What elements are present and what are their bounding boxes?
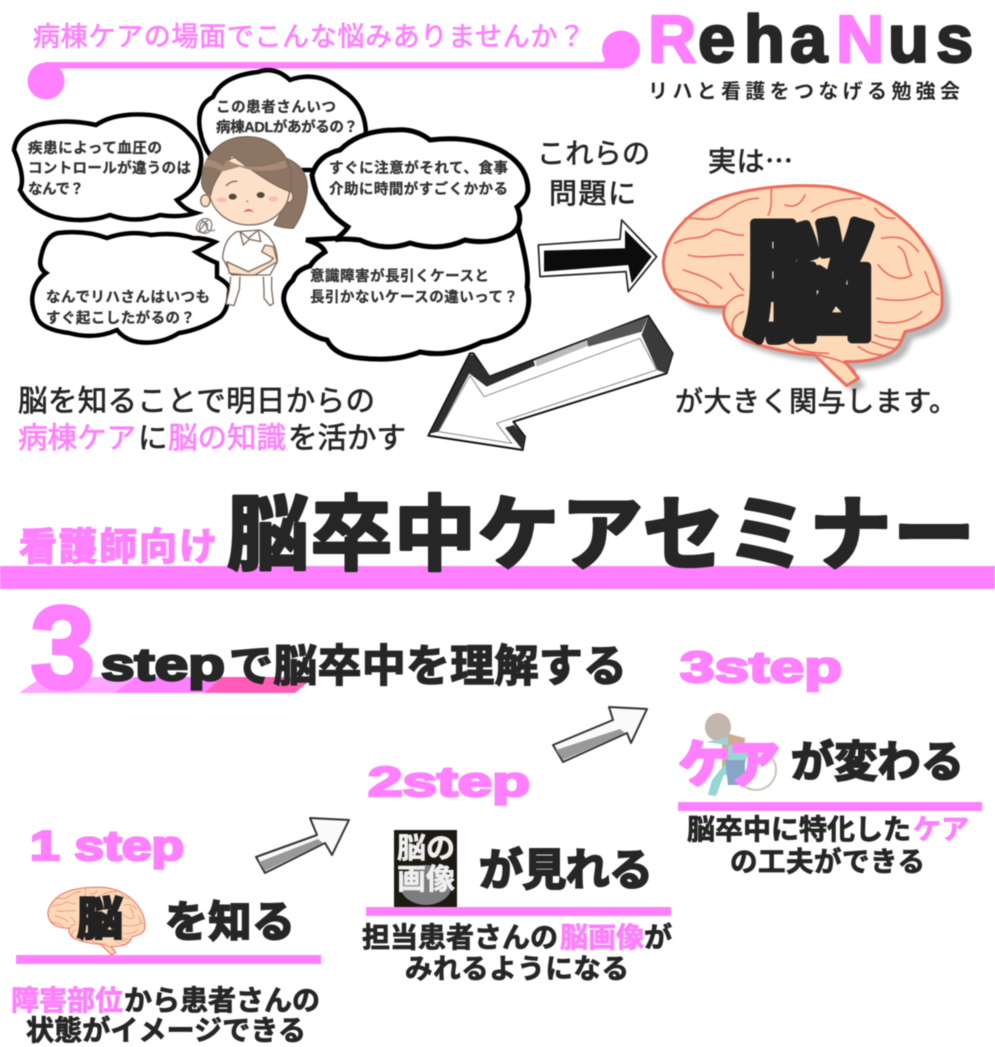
icon: caregiver with wheelchair bbox=[705, 713, 776, 796]
large numeral 3: 3 bbox=[30, 582, 96, 714]
logo wordmark: u bbox=[888, 2, 929, 77]
bubble: when does ward ADL improve: この患者さんいつ bbox=[216, 98, 336, 116]
know word: を知る bbox=[165, 899, 295, 947]
logo wordmark: a bbox=[790, 2, 828, 77]
bubble: why rehab staff sit patients up: なんでリハさんはいつも bbox=[46, 289, 210, 306]
question text: 病棟ケアの場面でこんな悩みありませんか？ bbox=[33, 22, 585, 52]
step 3 label: 3step bbox=[680, 643, 842, 692]
text line 2: に bbox=[138, 422, 168, 455]
text line 2: を活かす bbox=[288, 422, 406, 455]
text: use brain knowledge from tomorrow bbox=[18, 385, 406, 455]
step 1 description line 1: 障害部位 bbox=[11, 985, 123, 1016]
step 2 label: 2step bbox=[368, 758, 530, 805]
bubble: consciousness disorder cases: 意識障害が長引くケースと bbox=[310, 267, 489, 285]
step 3 divider bbox=[678, 802, 982, 811]
step word: step bbox=[101, 639, 225, 690]
icon: brain image bbox=[394, 830, 457, 907]
nurse face bbox=[209, 155, 289, 225]
bubble: consciousness disorder cases: 長引かないケースの違いって？ bbox=[310, 288, 518, 306]
logo wordmark: h bbox=[744, 2, 785, 77]
icon: small brain: 脳 bbox=[77, 893, 123, 945]
logo tagline: リハと看護をつなげる勉強会 bbox=[648, 80, 960, 103]
underline with round ends bbox=[28, 30, 640, 100]
nurse collar bbox=[240, 230, 261, 245]
worry scribble bbox=[196, 219, 215, 233]
arrow: from step 1 to step 2 bbox=[256, 818, 349, 873]
bubble: consciousness disorder cases bbox=[284, 225, 529, 359]
step 2 description line 1: 脳画像 bbox=[560, 922, 644, 953]
step 2 description line 1: が bbox=[644, 921, 672, 953]
text: actually: 実は… bbox=[708, 140, 793, 180]
logo wordmark: N bbox=[836, 2, 884, 77]
bubble: when does ward ADL improve bbox=[199, 70, 366, 170]
nurse ears bbox=[201, 195, 210, 207]
step 1 divider bbox=[16, 955, 321, 964]
illustration: worried nurse bbox=[196, 137, 307, 306]
logo wordmark: s bbox=[936, 2, 973, 77]
nurse crossed arms bbox=[227, 245, 277, 275]
bubble: distracted during meal assistance bbox=[312, 130, 528, 247]
bubble: why rehab staff sit patients up bbox=[32, 232, 229, 343]
text line 2: 病棟ケア bbox=[18, 422, 136, 455]
nurse legs and socks bbox=[226, 277, 273, 306]
ribbon underlay bbox=[19, 677, 314, 693]
panel: step 3 bbox=[678, 643, 982, 877]
brain illustration with kanji bbox=[663, 186, 949, 393]
bubble: blood pressure control: コントロールが違うのは bbox=[28, 159, 192, 177]
bubble: distracted during meal assistance: 介助に時間がすごくかかる bbox=[329, 180, 508, 198]
text: these problems bbox=[537, 138, 650, 209]
arrow: from step 2 to step 3 bbox=[553, 707, 647, 762]
panel: step 1 bbox=[11, 822, 321, 1046]
nurse hair highlight bbox=[204, 159, 287, 172]
text: plays a big role: が大きく関与します。 bbox=[675, 386, 957, 417]
step 3 description line 2: の工夫ができる bbox=[730, 846, 925, 877]
step 1 label: 1 step bbox=[30, 822, 184, 869]
heading: top question bbox=[28, 22, 640, 100]
title prefix: 看護師向け bbox=[19, 527, 217, 569]
care word: ケア bbox=[679, 737, 779, 793]
bubble: blood pressure control: なんで？ bbox=[28, 181, 84, 198]
band: seminar title underline bbox=[0, 566, 995, 589]
logo wordmark: e bbox=[698, 2, 735, 77]
nurse hair bbox=[202, 137, 292, 195]
step 1 description line 2: 状態がイメージできる bbox=[26, 1014, 306, 1046]
panel: worry speech bubbles bbox=[14, 70, 529, 359]
brain shadow bbox=[671, 193, 949, 393]
panel: step 2 bbox=[362, 758, 672, 984]
step 3 description line 1: 脳卒中に特化した bbox=[687, 814, 911, 845]
text line 2: 脳の知識 bbox=[168, 422, 286, 455]
nurse ponytail bbox=[274, 158, 307, 228]
icon: brain image: 脳の bbox=[397, 833, 455, 865]
can see word: が見れる bbox=[479, 846, 653, 895]
step 3 description line 1: ケア bbox=[913, 814, 969, 845]
text line 1: 脳を知ることで明日からの bbox=[18, 385, 375, 418]
text line 1: これらの bbox=[537, 138, 650, 169]
icon: small brain bbox=[48, 887, 145, 955]
text line 2: 問題に bbox=[549, 178, 636, 209]
icon: brain image: 画像 bbox=[397, 863, 455, 896]
brain drawing bbox=[663, 186, 942, 386]
title: seminar for nurses bbox=[19, 490, 975, 581]
logo: RehaNus bbox=[648, 2, 973, 103]
title main: 脳卒中ケアセミナー bbox=[227, 490, 975, 581]
brain kanji: 脳 bbox=[744, 211, 874, 357]
changes word: が変わる bbox=[791, 739, 964, 787]
bubble: when does ward ADL improve: 病棟ADLがあがるの？ bbox=[216, 118, 358, 136]
logo wordmark: R bbox=[648, 2, 696, 77]
step 2 divider bbox=[366, 907, 671, 916]
bubble: blood pressure control bbox=[14, 114, 201, 220]
arrow: large sketched left arrow bbox=[428, 316, 673, 450]
step 2 description line 1: 担当患者さんの bbox=[362, 922, 558, 953]
bubble: why rehab staff sit patients up: すぐ起こしたがるの？ bbox=[46, 309, 195, 327]
arrow: black right arrow bbox=[538, 220, 657, 292]
heading: understand stroke in 3 steps bbox=[19, 582, 627, 714]
step 1 description line 1: から患者さんの bbox=[124, 985, 320, 1016]
bubble: distracted during meal assistance: すぐに注意がそれて、食事 bbox=[329, 159, 508, 177]
heading text: で脳卒中を理解する bbox=[229, 642, 627, 691]
bubble: blood pressure control: 疾患によって血圧の bbox=[28, 139, 162, 157]
nurse torso bbox=[223, 230, 277, 275]
step 2 description line 2: みれるようになる bbox=[405, 953, 629, 984]
nurse expression bbox=[217, 192, 278, 212]
